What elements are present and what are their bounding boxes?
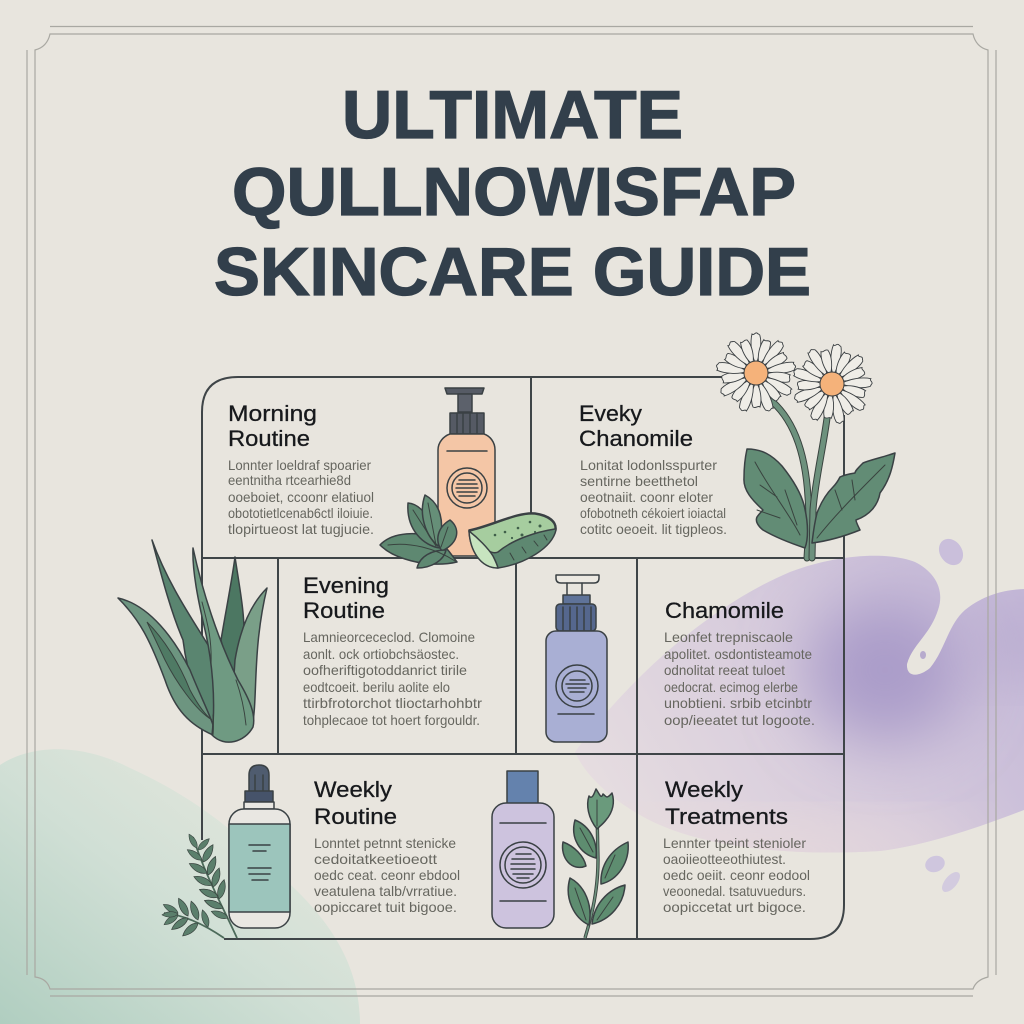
watercolor: green wash xyxy=(0,749,360,1024)
left leaf xyxy=(744,449,808,548)
panel: evening routine text: Lamnieorcececlod. Clomoine xyxy=(303,630,475,645)
stems xyxy=(768,398,828,558)
panel: evening routine text: oofheriftigotoddanrict tirile xyxy=(303,663,467,678)
icon: peach pump bottle xyxy=(438,388,495,556)
panel: chamomile text: odnolitat reeat tuloet xyxy=(664,663,785,678)
panel: chamomile text: oedocrat. ecimog elerbe xyxy=(664,680,798,695)
icon: lavender bottle xyxy=(492,771,554,928)
panel: chamomile text: Chamomile xyxy=(665,598,784,623)
icon: fern sprig xyxy=(162,833,237,938)
panel: evening routine text: aonlt. ock ortiobchsäostec. xyxy=(303,647,459,662)
right leaf xyxy=(812,453,895,543)
panel: weekly routine text: Routine xyxy=(314,804,397,829)
panel: morning routine text: ooeboiet, ccoonr elatiuol xyxy=(228,490,374,505)
grid table outline xyxy=(202,377,844,939)
panel: every chamomile text: oeotnaiit. coonr eloter xyxy=(580,490,713,505)
panel: evening routine text: Evening xyxy=(303,573,389,598)
panel: weekly treatments text: oopiccetat urt bigoce. xyxy=(663,900,806,915)
watercolor: purple wash xyxy=(575,534,1024,895)
panel: morning routine text: tlopirtueost lat tugjucie. xyxy=(228,522,374,537)
panel: every chamomile text: cotitc oeoeit. lit tigpleos. xyxy=(580,522,727,537)
icon: herb sprig xyxy=(563,789,628,938)
panel: every chamomile text xyxy=(579,401,727,537)
panel: weekly routine text: veatulena talb/vrratiue. xyxy=(314,884,457,899)
panel: weekly treatments text: Weekly xyxy=(665,777,744,802)
flower two xyxy=(792,344,872,424)
panel: evening routine text: ttirbfrotorchot tlioctarhohbtr xyxy=(303,696,483,711)
panel: morning routine text: eentnitha rtcearhie8d xyxy=(228,473,351,488)
title: SKINCARE GUIDE xyxy=(214,234,811,310)
title xyxy=(214,77,811,310)
panel: every chamomile text: Chanomile xyxy=(579,426,693,451)
panel: every chamomile text: Lonitat lodonlsspurter xyxy=(580,458,717,473)
panel: evening routine text: Routine xyxy=(303,598,385,623)
panel: every chamomile text: Eveky xyxy=(579,401,643,426)
panel: weekly treatments text xyxy=(663,777,810,915)
icon: aloe slice xyxy=(469,513,556,568)
panel: weekly routine text: oedc ceat. ceonr ebdool xyxy=(314,868,460,883)
panel: weekly routine text xyxy=(314,777,460,915)
panel: weekly treatments text: veoonedal. tsatuvuedurs. xyxy=(663,884,806,899)
panel: weekly routine text: Weekly xyxy=(314,777,393,802)
panel: chamomile text: oop/ieeatet tut logoote. xyxy=(664,713,815,728)
panel: evening routine text: tohplecaoe tot hoert forgouldr. xyxy=(303,713,480,728)
panel: morning routine text: obototietlcenab6ctl iloiuie. xyxy=(228,506,373,521)
panel: every chamomile text: sentirne beetthetol xyxy=(580,474,698,489)
panel: weekly routine text: oopiccaret tuit bigooe. xyxy=(314,900,457,915)
panel: weekly treatments text: Treatments xyxy=(665,804,788,829)
panel: weekly routine text: Lonntet petnnt stenicke xyxy=(314,836,456,851)
panel: chamomile text: unobtieni. srbib etcinbtr xyxy=(664,696,812,711)
title: QULLNOWISFAP xyxy=(232,154,796,230)
title: ULTIMATE xyxy=(342,77,683,153)
panel: weekly treatments text: oedc oeiit. ceonr eodool xyxy=(663,868,810,883)
icon: chamomile flowers xyxy=(716,333,895,558)
panel: morning routine text xyxy=(228,401,374,537)
panel: evening routine text xyxy=(303,573,483,728)
panel: morning routine text: Morning xyxy=(228,401,317,426)
icon: teal dropper bottle xyxy=(229,765,290,928)
icon: green leaves xyxy=(380,495,457,568)
panel: weekly routine text: cedoitatkeetioeott xyxy=(314,852,437,867)
flower one xyxy=(716,333,796,412)
panel: chamomile text xyxy=(664,598,815,728)
panel: weekly treatments text: oaoiieotteeothiutest. xyxy=(663,852,786,867)
panel: morning routine text: Routine xyxy=(228,426,310,451)
panel: every chamomile text: ofobotneth cékoiert ioiactal xyxy=(580,506,726,521)
panel: chamomile text: Leonfet trepniscaole xyxy=(664,630,793,645)
panel: morning routine text: Lonnter loeldraf spoarier xyxy=(228,458,371,473)
panel: chamomile text: apolitet. osdontisteamote xyxy=(664,647,812,662)
icon: aloe vera plant xyxy=(118,540,267,742)
icon: blue pump bottle xyxy=(546,575,607,742)
panel: evening routine text: eodtcoeit. berilu aolite elo xyxy=(303,680,450,695)
panel: weekly treatments text: Lennter tpeint stenioler xyxy=(663,836,806,851)
